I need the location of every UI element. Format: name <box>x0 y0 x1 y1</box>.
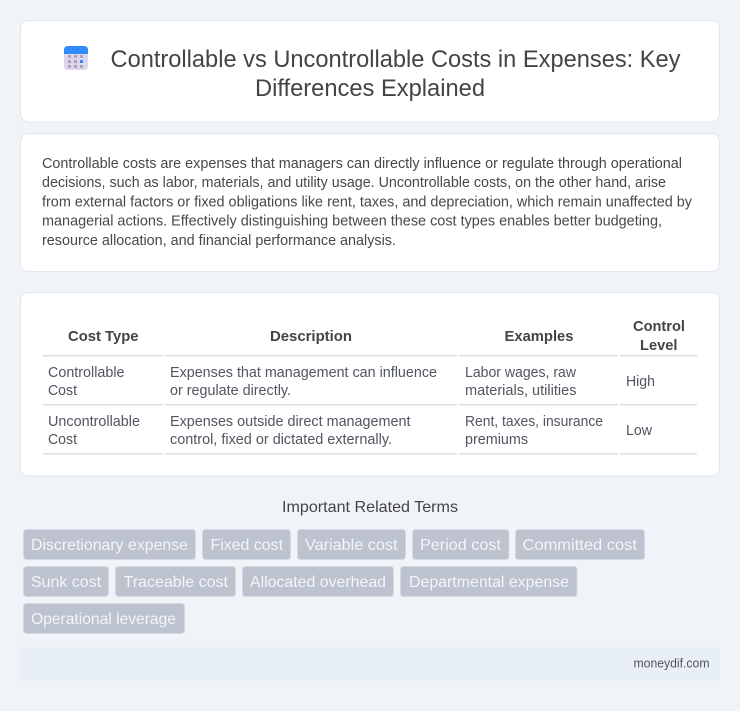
table row: uncontrollable cost: Expenses outside direct management <box>170 414 410 430</box>
table header row: Control <box>633 318 685 335</box>
table row: controllable cost <box>48 365 655 399</box>
table row: controllable cost: materials, utilities <box>465 383 576 399</box>
title <box>110 46 681 102</box>
footer: moneydif.com <box>634 656 710 670</box>
text block: introduction paragraph: resource allocation, and financial performance analysis. <box>42 233 396 249</box>
title: Controllable vs Uncontrollable Costs in Expenses: Key <box>110 46 681 73</box>
tag: allocated overhead: Allocated overhead <box>250 574 386 591</box>
tag: committed cost <box>516 530 644 560</box>
table row: uncontrollable cost: premiums <box>465 432 528 448</box>
tag: departmental expense <box>400 566 577 596</box>
table row: uncontrollable cost: control, fixed or dictated externally. <box>170 432 392 448</box>
table header row: Cost Type <box>68 328 138 345</box>
heading: important related terms: Important Related Terms <box>282 499 458 516</box>
tag: traceable cost <box>116 566 236 596</box>
table row: controllable cost: High <box>626 374 655 390</box>
panel: introduction <box>20 134 720 272</box>
tag: traceable cost: Traceable cost <box>124 574 229 591</box>
tag: fixed cost: Fixed cost <box>210 537 284 554</box>
tag: operational leverage <box>24 604 184 634</box>
tag: period cost: Period cost <box>420 537 502 554</box>
panel: related term tags <box>24 530 644 634</box>
tag: variable cost <box>298 530 406 560</box>
text block: introduction paragraph: from external factors or fixed obligations like rent, taxes, and depreciation, which remain unaffected by <box>42 194 693 210</box>
tag: period cost <box>412 530 509 560</box>
table row: controllable cost: Expenses that management can influence <box>170 365 437 381</box>
table row: controllable cost: Cost <box>48 383 77 399</box>
tag: sunk cost: Sunk cost <box>31 574 102 591</box>
tag: fixed cost <box>202 530 290 560</box>
tag: discretionary expense: Discretionary expense <box>31 537 188 554</box>
table row: controllable cost: Labor wages, raw <box>465 365 577 381</box>
table row: uncontrollable cost: Low <box>626 423 653 439</box>
table row: controllable cost: or regulate directly. <box>170 383 291 399</box>
tag: variable cost: Variable cost <box>305 537 398 554</box>
table header row: Description <box>270 328 352 345</box>
table header row: Level <box>640 337 678 354</box>
table header row <box>68 318 685 354</box>
icon: calendar <box>64 46 88 70</box>
footer <box>20 647 720 681</box>
table row: uncontrollable cost: Rent, taxes, insurance <box>465 414 603 430</box>
tag: allocated overhead <box>242 566 394 596</box>
text block: introduction paragraph: decisions, such as labor, materials, and utility usage. Uncontrollable costs, on the other hand, arise <box>42 175 666 191</box>
table row: uncontrollable cost: Uncontrollable <box>48 414 140 430</box>
table header row: Examples <box>504 328 574 345</box>
title: Differences Explained <box>255 75 485 102</box>
tag: sunk cost <box>24 566 108 596</box>
tag: committed cost: Committed cost <box>522 537 638 554</box>
text block: introduction paragraph: Controllable costs are expenses that managers can directly influence or regulate through operational <box>42 156 682 172</box>
text block: introduction paragraph <box>42 156 693 249</box>
table row: uncontrollable cost: Cost <box>48 432 77 448</box>
tag: operational leverage: Operational leverage <box>31 611 176 628</box>
text block: introduction paragraph: managerial actions. Effectively distinguishing between these cost types enables better budgeting, <box>42 214 662 230</box>
table row: controllable cost: Controllable <box>48 365 124 381</box>
tag: discretionary expense <box>24 530 196 560</box>
panel: comparison table <box>20 292 720 476</box>
panel: title header <box>20 20 720 122</box>
table row: uncontrollable cost <box>48 414 653 448</box>
tag: departmental expense: Departmental expense <box>409 574 569 591</box>
